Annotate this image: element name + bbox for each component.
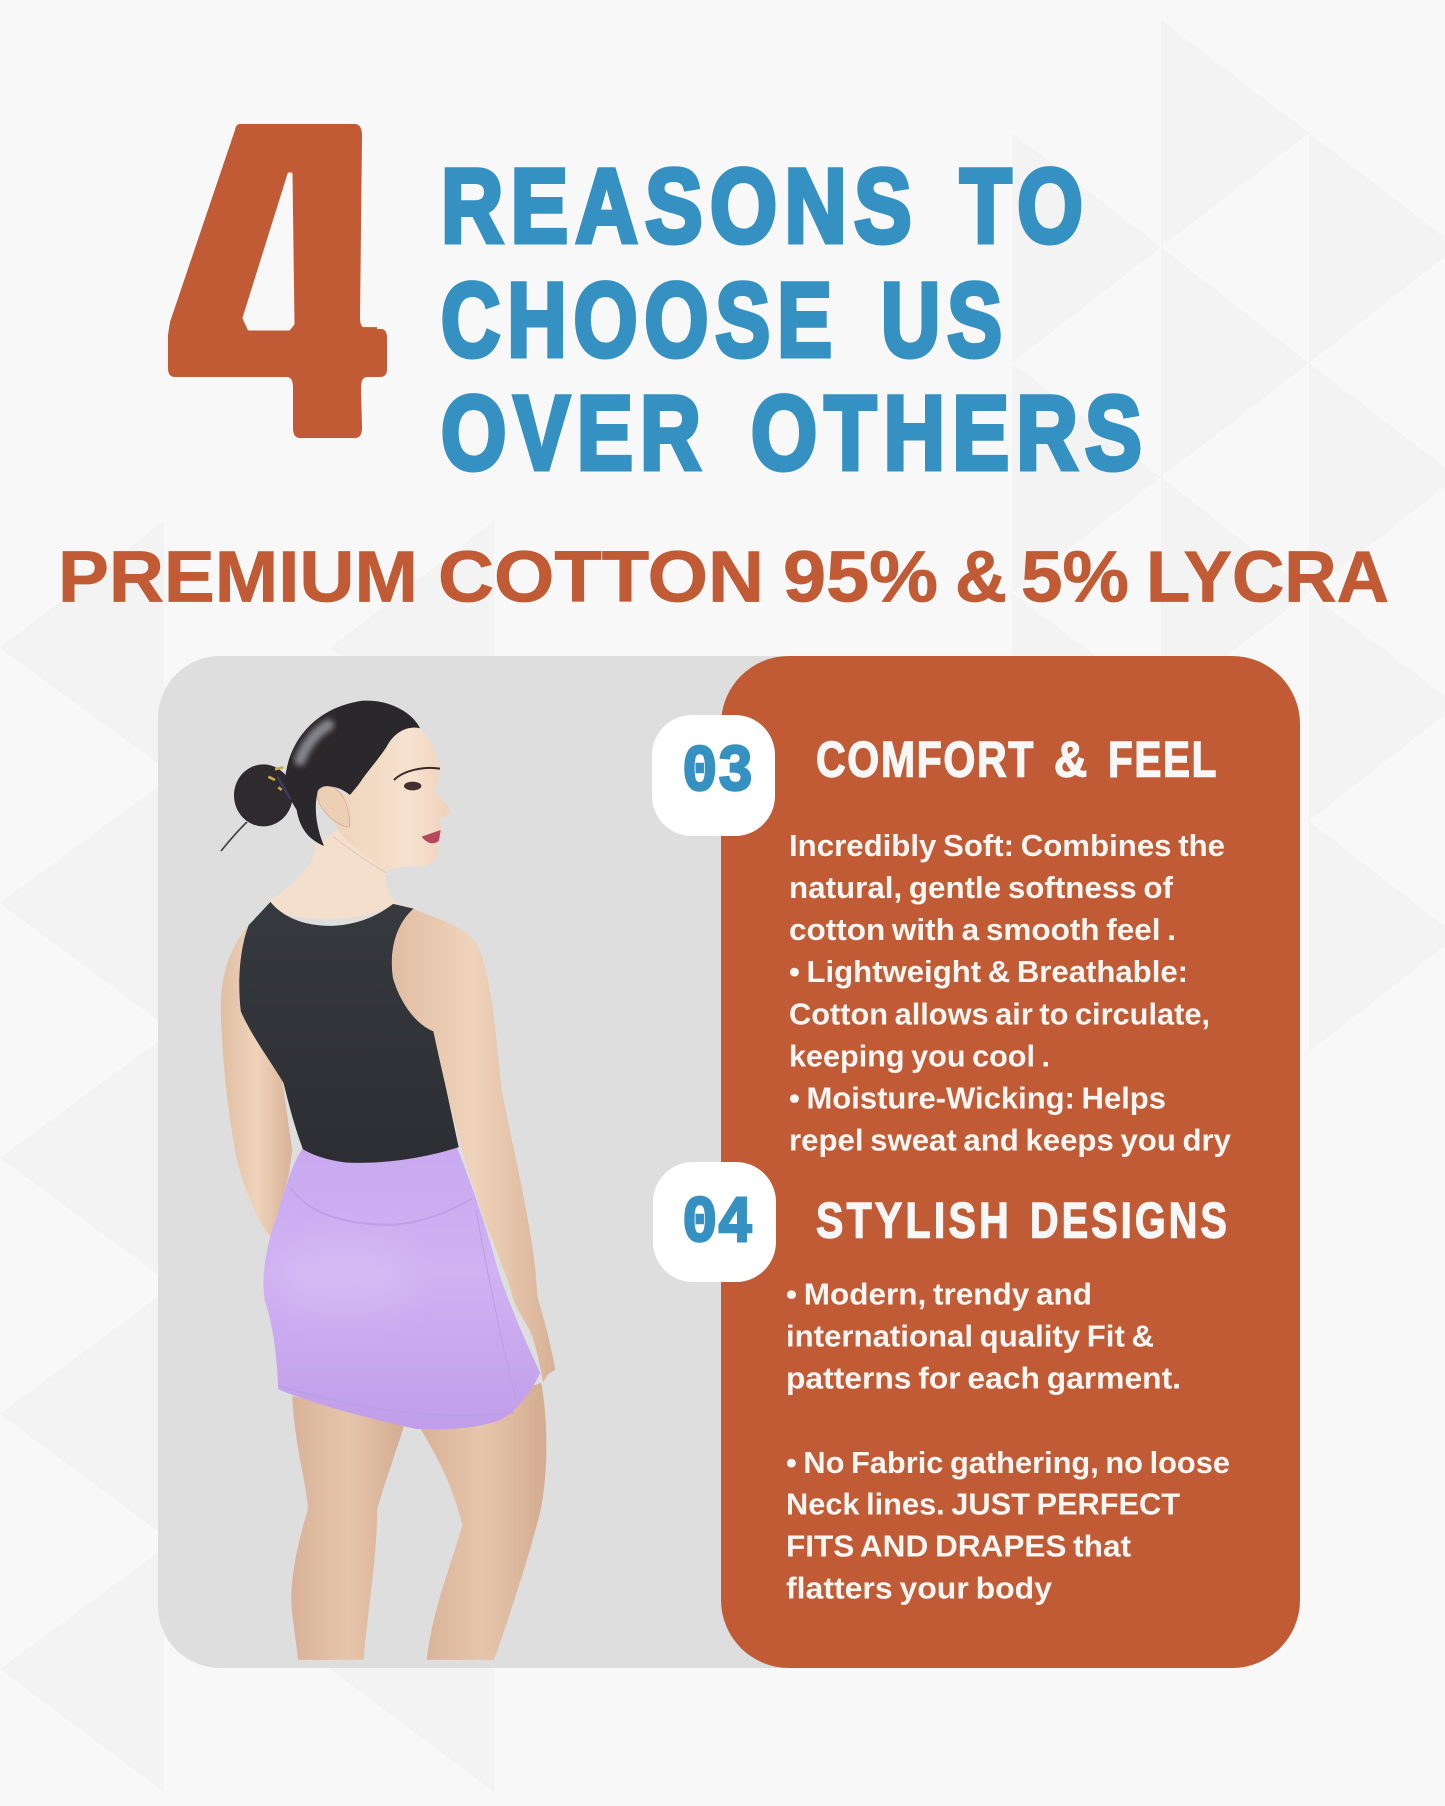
hair tie: [277, 777, 291, 799]
skirt: [264, 1145, 540, 1429]
left arm: [221, 925, 292, 1237]
eyebrow: [394, 768, 440, 780]
heading: stylish designs: STYLISH: [816, 1192, 1012, 1248]
subtitle: fabric composition: PREMIUM: [58, 538, 418, 618]
title: reasons to choose us over others: CHOOSE: [441, 262, 839, 379]
subtitle: fabric composition: &: [955, 538, 1007, 618]
heading: stylish designs: [816, 1192, 1230, 1248]
text block: comfort and feel details: • Lightweight & Breathable:: [789, 954, 1188, 989]
text block: comfort and feel details: Cotton allows air to circulate,: [789, 996, 1210, 1032]
neck and upper back: [268, 820, 398, 919]
title: reasons to choose us over others: OTHERS: [751, 375, 1149, 492]
text block: comfort and feel details: cotton with a smooth feel .: [789, 912, 1176, 947]
hair: [285, 701, 420, 846]
text block: stylish designs details: international quality Fit &: [786, 1318, 1154, 1354]
heading: comfort and feel: FEEL: [1108, 732, 1218, 788]
lips: [422, 830, 441, 843]
title: reasons to choose us over others: REASONS: [441, 148, 919, 265]
text block: comfort and feel details: • Moisture-Wicking: Helps: [789, 1080, 1166, 1116]
badge 04: 04: [682, 1186, 753, 1261]
hair bun: [234, 764, 293, 826]
subtitle: fabric composition: COTTON: [438, 538, 764, 618]
skirt waistband fold: [278, 1187, 516, 1415]
text block: comfort and feel details: [789, 828, 1232, 1158]
jaw shadow: [333, 837, 386, 873]
title: reasons to choose us over others: TO: [960, 148, 1090, 265]
hair clip: [268, 767, 283, 790]
heading: stylish designs: DESIGNS: [1030, 1192, 1230, 1248]
text block: stylish designs details: flatters your body: [786, 1570, 1053, 1606]
subtitle: fabric composition: 95%: [783, 538, 938, 618]
text block: comfort and feel details: Incredibly Soft: Combines the: [789, 828, 1225, 863]
heading: comfort and feel: COMFORT: [816, 732, 1035, 788]
title numeral 4: 4: [174, 46, 381, 521]
badge 04: [653, 1162, 776, 1282]
heading: comfort and feel: [816, 732, 1218, 788]
hair strand: [221, 822, 247, 851]
badge 03: 03: [682, 735, 753, 810]
text block: stylish designs details: FITS AND DRAPES that: [786, 1528, 1131, 1564]
text block: stylish designs details: • No Fabric gathering, no loose: [786, 1445, 1230, 1480]
panel: grey photo background: [158, 656, 858, 1668]
subtitle: fabric composition: [58, 538, 1389, 618]
text block: comfort and feel details: keeping you cool .: [789, 1038, 1050, 1074]
text block: stylish designs details: patterns for each garment.: [786, 1360, 1181, 1396]
left leg: [291, 1396, 405, 1660]
text block: stylish designs details: • Modern, trendy and: [786, 1276, 1092, 1312]
head: [221, 701, 450, 873]
title: reasons to choose us over others: US: [881, 262, 1009, 379]
right leg: [419, 1383, 546, 1660]
skirt highlight: [278, 1243, 413, 1310]
text block: comfort and feel details: natural, gentle softness of: [789, 870, 1174, 905]
text block: stylish designs details: [786, 1276, 1230, 1606]
title: reasons to choose us over others: [441, 148, 1149, 492]
right arm and shoulder: [392, 909, 555, 1383]
text block: comfort and feel details: repel sweat and keeps you dry: [789, 1122, 1232, 1158]
photo: woman seen from behind wearing black top and lilac skirt: [221, 701, 555, 1660]
ear: [317, 786, 350, 827]
heading: comfort and feel: &: [1054, 732, 1089, 788]
title: reasons to choose us over others: OVER: [441, 375, 708, 492]
badge 03: [652, 715, 775, 836]
text block: stylish designs details: Neck lines. JUST PERFECT: [786, 1486, 1180, 1522]
panel: orange reasons card: [721, 656, 1300, 1668]
face: [318, 728, 450, 872]
black tank top: [239, 902, 459, 1163]
hair highlight: [300, 725, 328, 760]
subtitle: fabric composition: 5%: [1021, 538, 1129, 618]
eye: [404, 782, 421, 790]
subtitle: fabric composition: LYCRA: [1146, 538, 1389, 618]
